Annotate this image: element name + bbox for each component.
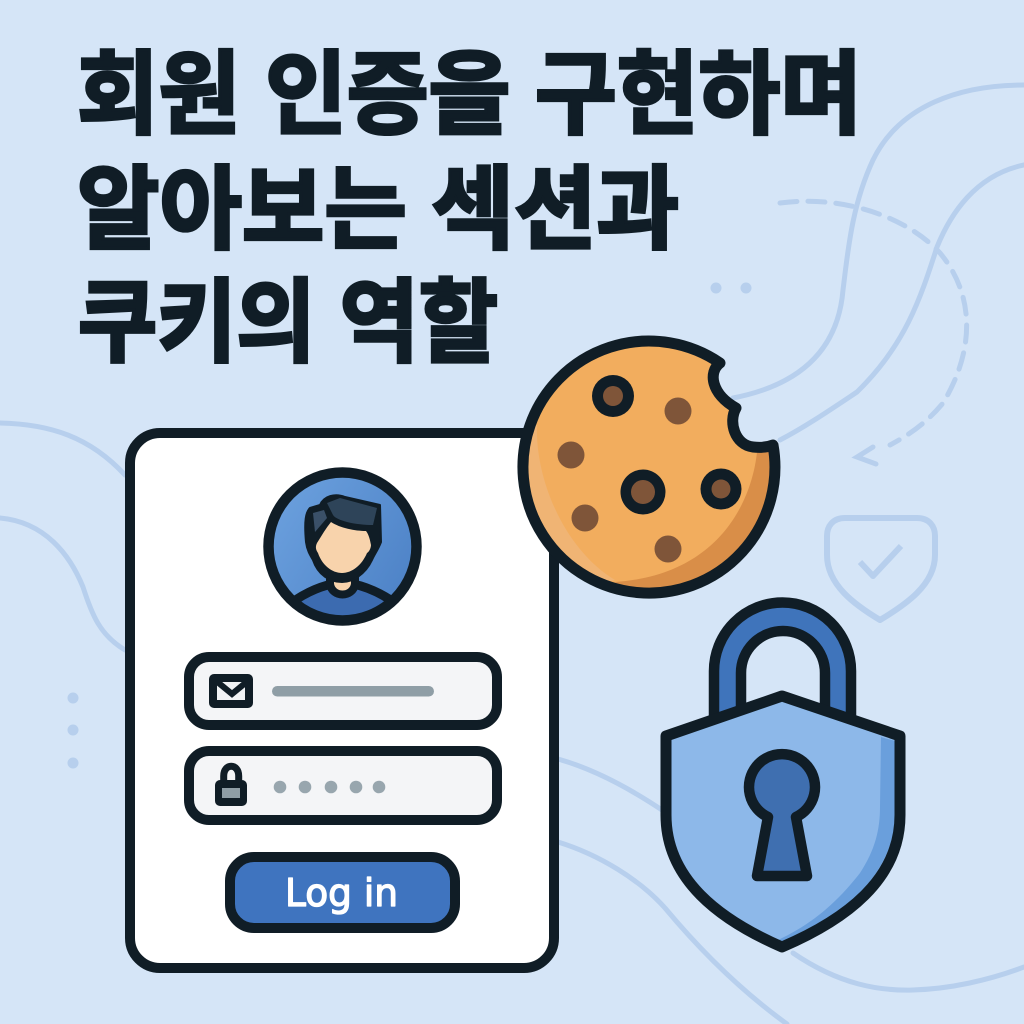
icon: shield padlock (666, 602, 900, 947)
shield outline (666, 696, 900, 947)
keyhole (749, 754, 815, 876)
password dots (274, 781, 385, 793)
password field (189, 751, 497, 820)
login button: Log in (285, 871, 398, 915)
email field (189, 657, 497, 725)
decorative dots (68, 282, 752, 768)
padlock shackle (714, 602, 851, 725)
title (77, 45, 862, 374)
icon: envelope (213, 678, 249, 704)
title: 쿠키의 역할 (78, 273, 498, 374)
shield shading (778, 737, 895, 942)
icon: bitten cookie (517, 336, 780, 599)
icon: user avatar (268, 472, 416, 640)
icon: small padlock (215, 766, 247, 806)
shield body (666, 696, 900, 947)
login button (230, 857, 455, 928)
icon: background shield with check (827, 518, 935, 620)
panel: login card (130, 433, 554, 968)
title: 알아보는 섹션과 (77, 160, 679, 261)
title: 회원 인증을 구현하며 (77, 45, 862, 146)
